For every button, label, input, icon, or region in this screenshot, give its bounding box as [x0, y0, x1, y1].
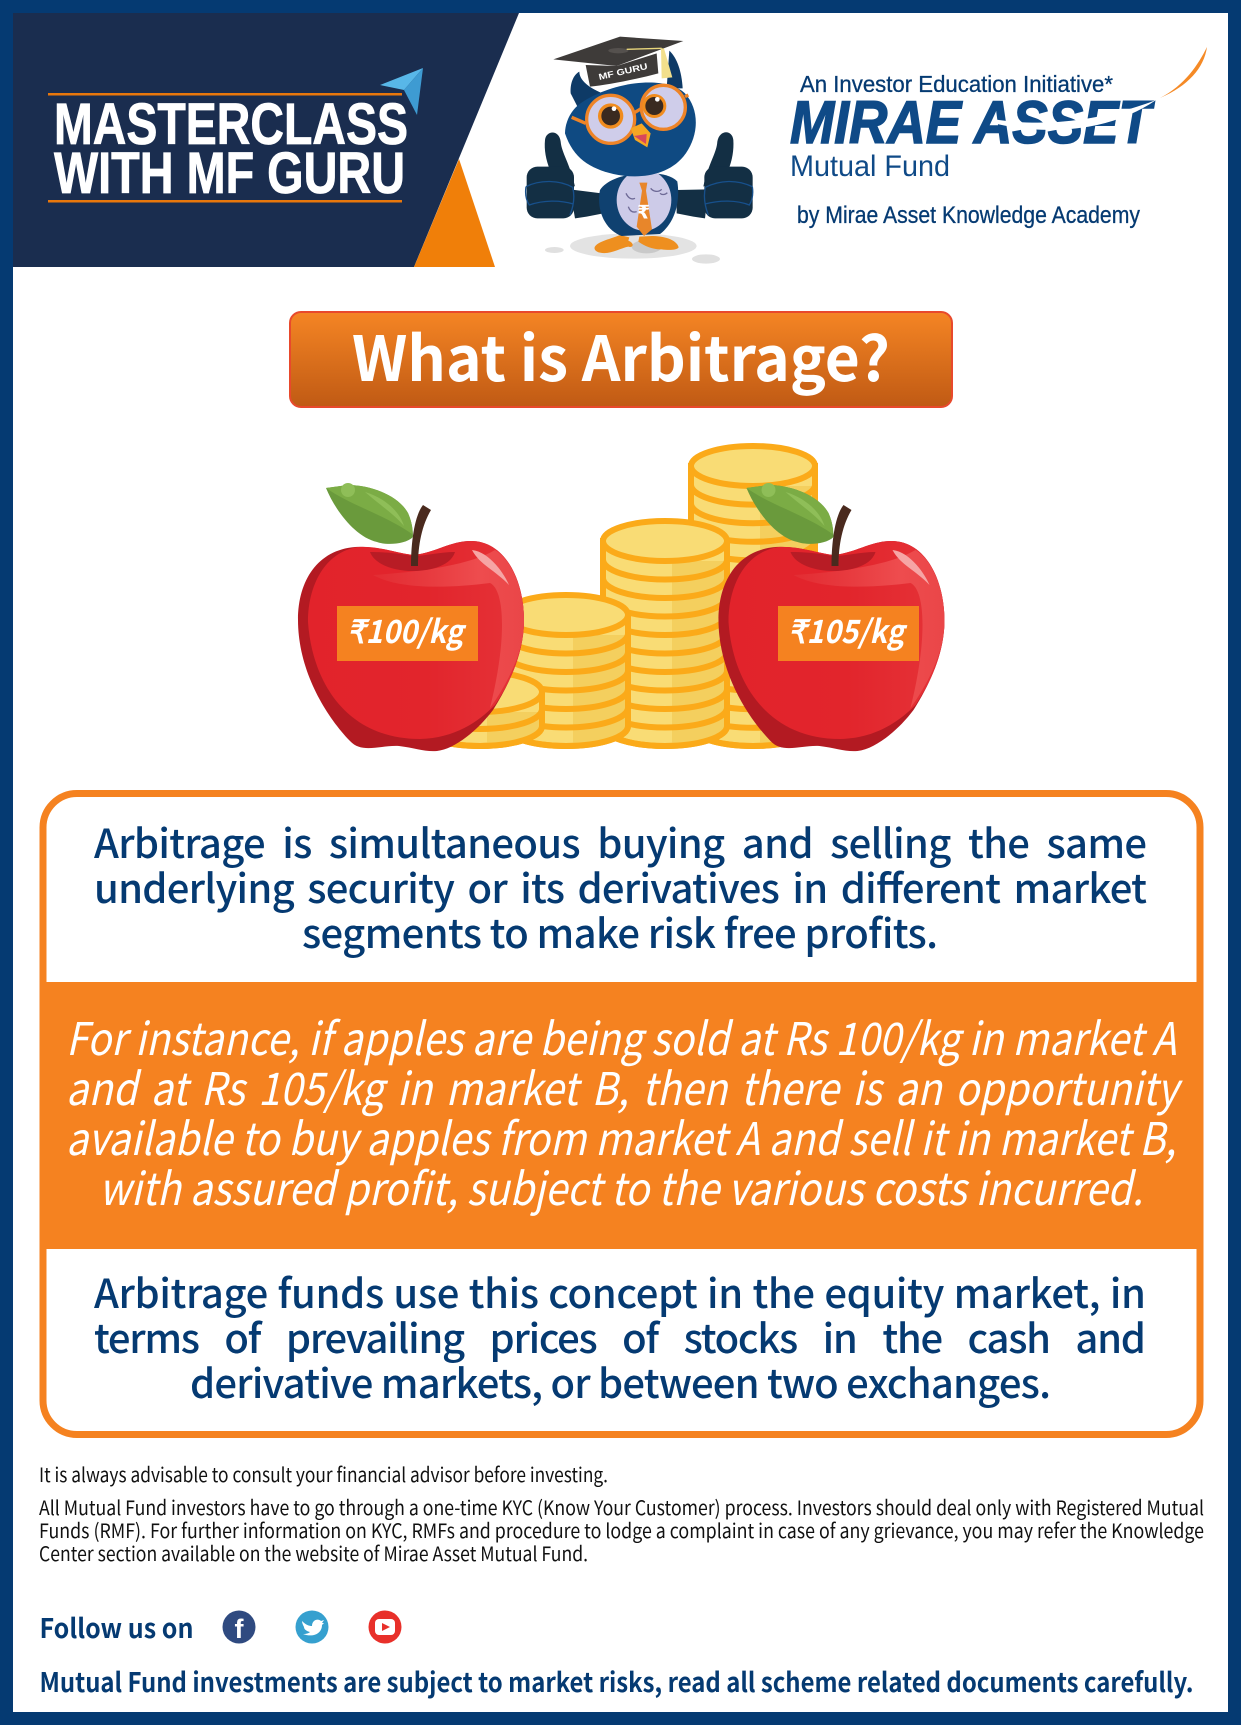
follow us label: Follow us on — [40, 1607, 194, 1646]
owl feet — [595, 235, 679, 253]
apple B price tag: ₹105/kg — [788, 607, 908, 653]
apple A price tag: ₹100/kg — [347, 607, 467, 653]
icon: youtube — [368, 1610, 402, 1644]
title button — [290, 309, 952, 407]
apple A leaf — [326, 483, 413, 544]
owl arms and thumbs — [526, 132, 753, 218]
arbitrage funds text — [94, 1262, 1146, 1410]
icon: facebook — [222, 1610, 256, 1644]
apple B highlight — [892, 550, 930, 585]
owl belly — [617, 169, 671, 231]
coin stack 1 — [418, 672, 542, 746]
apple B leaf — [746, 483, 834, 544]
academy line: by Mirae Asset Knowledge Academy — [797, 202, 1140, 229]
example text — [66, 1003, 1183, 1218]
icon: twitter — [296, 1610, 328, 1644]
definition text: Arbitrage is simultaneous buying and selling the same — [94, 812, 1147, 870]
apple A highlight — [472, 550, 509, 585]
banner title: MASTERCLASS — [54, 92, 408, 157]
banner title: WITH MF GURU — [54, 141, 405, 206]
explanation box — [40, 794, 1204, 1434]
graduation cap: MF GURU — [598, 61, 649, 82]
white swoosh — [993, 100, 1156, 130]
owl mascot — [526, 37, 753, 264]
owl body — [599, 173, 678, 236]
owl tie: ₹ — [637, 202, 650, 223]
apple B — [718, 483, 944, 751]
logo block — [790, 47, 1207, 229]
arbitrage funds text: derivative markets, or between two exchanges. — [190, 1352, 1051, 1410]
mutual fund: Mutual Fund — [790, 150, 950, 183]
disclaimer text: It is always advisable to consult your financial advisor before investing. — [39, 1459, 608, 1488]
coin stack 2 — [504, 595, 628, 746]
header banner — [13, 13, 519, 267]
disclaimer text — [39, 1459, 1204, 1567]
heading: What is Arbitrage? — [352, 309, 890, 399]
apple B light band — [794, 550, 944, 708]
owl shadows — [545, 233, 720, 264]
coin stack 3 — [603, 521, 727, 746]
arbitrage funds text: Arbitrage funds use this concept in the equity market, in — [94, 1262, 1146, 1320]
apple A stem — [411, 505, 431, 566]
owl beak — [631, 123, 651, 147]
illustration: coins and apples — [298, 446, 944, 751]
owl head — [565, 51, 696, 176]
orange band — [40, 982, 1204, 1249]
banner rule bottom — [48, 200, 402, 202]
apple A light band — [373, 550, 524, 708]
definition text: segments to make risk free profits. — [302, 902, 938, 960]
apple A face — [308, 541, 524, 739]
box outline — [43, 794, 1200, 1434]
apple A — [298, 483, 524, 751]
disclaimer text: Center section available on the website of Mirae Asset Mutual Fund. — [39, 1538, 588, 1567]
icon: facebook: f — [234, 1614, 244, 1644]
apple B dimple — [790, 552, 876, 571]
graduation cap — [553, 37, 683, 87]
definition text — [94, 812, 1147, 960]
initiative line: An Investor Education Initiative* — [800, 71, 1113, 97]
definition text: underlying security or its derivatives in different market — [94, 857, 1147, 915]
dark banner panel — [13, 13, 519, 267]
apple A body — [298, 541, 524, 751]
coin stack 4 — [691, 446, 815, 746]
Mirae Asset wordmark: MIRAE ASSET — [790, 89, 1155, 156]
icon: paper plane — [380, 68, 423, 115]
owl tie — [637, 183, 652, 236]
banner rule top — [48, 93, 402, 96]
orange swoosh — [1160, 47, 1207, 98]
owl glasses and eyes — [572, 85, 688, 143]
apple B face — [728, 541, 944, 739]
apple B stem — [832, 505, 852, 566]
orange triangle — [414, 159, 495, 267]
apple A dimple — [370, 552, 455, 571]
arbitrage funds text: terms of prevailing prices of stocks in the cash and — [94, 1307, 1146, 1365]
banner title — [54, 92, 408, 206]
apple B body — [718, 541, 944, 751]
